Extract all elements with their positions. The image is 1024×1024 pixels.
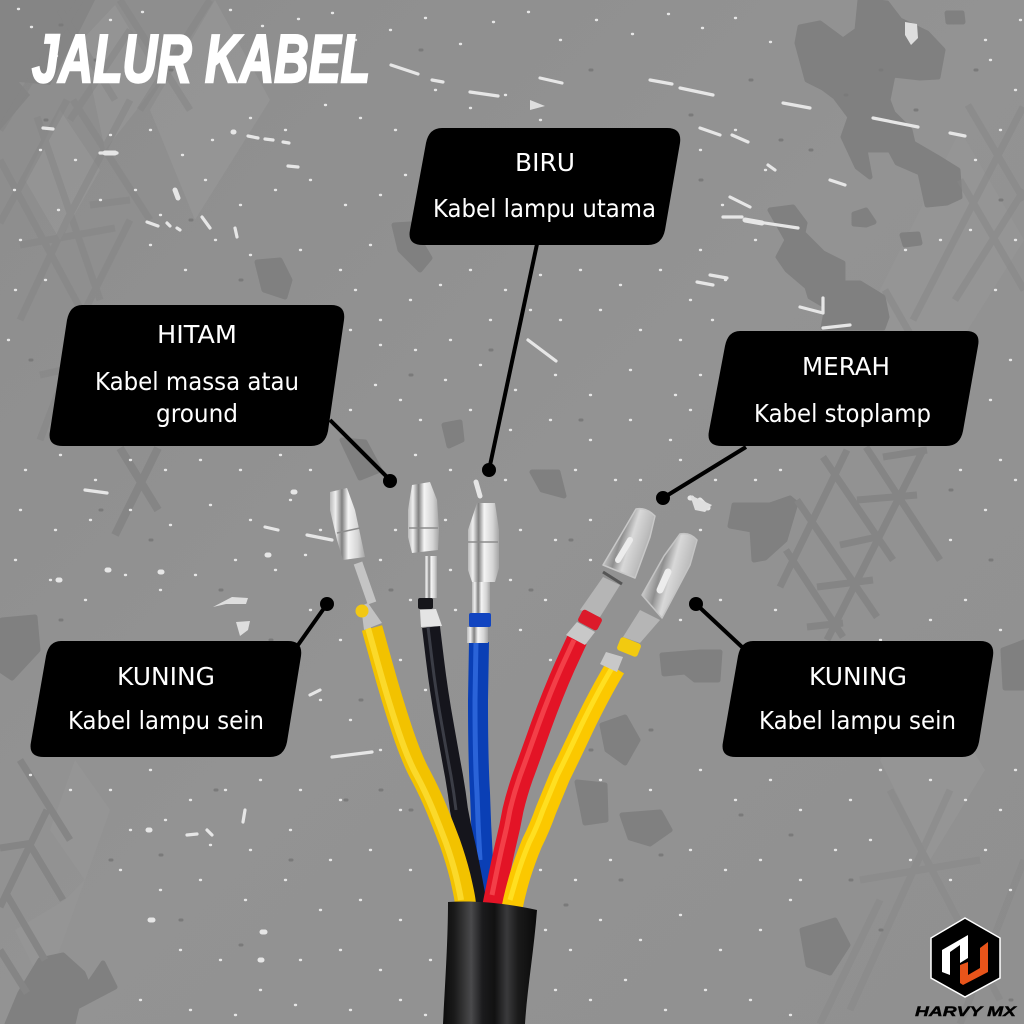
wire: blue [475, 642, 485, 905]
callout: merah: MERAH [802, 352, 890, 381]
callout: kuning right: KUNING [809, 662, 907, 691]
terminal: red [566, 509, 655, 645]
title: JALUR KABEL [32, 21, 370, 97]
callout: kuning left: Kabel lampu sein [68, 706, 264, 735]
callout: hitam [50, 305, 397, 488]
callout: merah: Kabel stoplamp [754, 399, 931, 428]
large flecks [43, 65, 965, 835]
callout: hitam: ground [156, 399, 238, 428]
wire: yellow left [368, 628, 466, 908]
terminal: yellow right [600, 534, 697, 672]
logo: harvy mx [915, 918, 1018, 1019]
callout: biru: Kabel lampu utama [433, 194, 656, 223]
terminal: blue [467, 503, 499, 643]
terminal: yellow left [330, 488, 382, 630]
callout: kuning right: Kabel lampu sein [759, 706, 956, 735]
wire: black [428, 627, 478, 905]
callout: kuning left: KUNING [117, 662, 215, 691]
logo: harvy mx: HARVY MX [915, 1003, 1018, 1019]
callout: biru [410, 128, 680, 477]
callout: kuning right [689, 597, 993, 757]
cable jacket [443, 901, 537, 1024]
wire: red [492, 640, 577, 905]
wires bundle [368, 627, 615, 908]
callout: merah [656, 331, 978, 505]
callout: hitam: HITAM [157, 320, 237, 349]
callout: hitam: Kabel massa atau [95, 367, 299, 396]
callout: kuning left [31, 597, 334, 757]
callout: biru: BIRU [515, 148, 575, 177]
wire: yellow right [510, 668, 615, 908]
terminal: black [408, 482, 442, 627]
